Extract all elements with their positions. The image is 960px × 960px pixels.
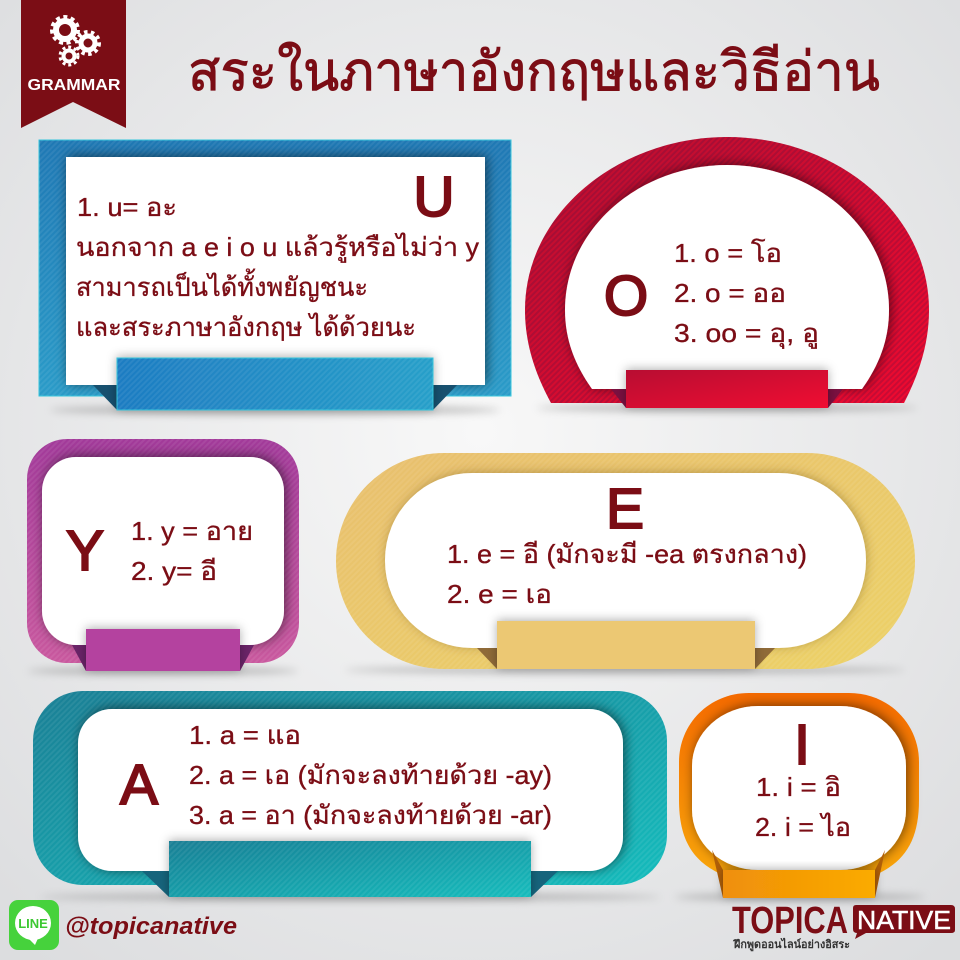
panel: O: [525, 137, 929, 412]
LINE contact: [9, 900, 237, 950]
icon: gears: [52, 17, 99, 65]
LINE contact: @topicanative: [65, 913, 237, 940]
text block U: 1. u= อะ: [77, 192, 177, 222]
panel: A: [33, 691, 667, 901]
text block E: 1. e = อี (มักจะมี -ea ตรงกลาง): [447, 539, 807, 569]
letter Y: Y: [66, 519, 104, 583]
text block U: [76, 192, 479, 342]
letter A: A: [120, 753, 158, 817]
text block O: [674, 238, 819, 349]
text block U: นอกจาก a e i o u แล้วรู้หรือไม่ว่า y: [76, 232, 479, 263]
panel: E: [336, 453, 915, 674]
text block O: 3. oo = อุ, อู: [674, 318, 819, 349]
text block Y: 2. y= อี: [131, 556, 217, 586]
text block E: [447, 539, 807, 609]
text block O: 2. o = ออ: [674, 278, 786, 308]
text block A: 3. a = อา (มักจะลงท้ายด้วย -ar): [189, 800, 552, 830]
text block O: 1. o = โอ: [674, 238, 782, 268]
title: สระในภาษาอังกฤษและวิธีอ่าน: [188, 41, 880, 102]
logo: Topica Native: NATIVE: [857, 905, 951, 935]
logo: Topica Native: [732, 900, 955, 952]
text block Y: 1. y = อาย: [131, 516, 253, 546]
panel: U: [39, 140, 511, 415]
logo: Topica Native: TOPICA: [732, 900, 848, 942]
icon: LINE: LINE: [18, 916, 48, 931]
text block U: และสระภาษาอังกฤษ ได้ด้วยนะ: [76, 312, 416, 342]
grammar ribbon badge: [21, 0, 126, 128]
letter E: E: [606, 477, 644, 541]
text block A: 1. a = แอ: [189, 720, 301, 750]
text block I: 2. i = ไอ: [755, 812, 851, 842]
text block A: [189, 720, 552, 830]
panel: I: [675, 693, 925, 901]
text block A: 2. a = เอ (มักจะลงท้ายด้วย -ay): [189, 760, 552, 790]
text block U: สามารถเป็นได้ทั้งพยัญชนะ: [76, 268, 368, 302]
text block I: [755, 772, 851, 842]
letter O: O: [604, 264, 648, 328]
text block I: 1. i = อิ: [756, 772, 841, 802]
grammar ribbon badge: GRAMMAR: [28, 77, 121, 94]
text block Y: [131, 516, 253, 586]
letter U: U: [413, 165, 455, 229]
text block E: 2. e = เอ: [447, 579, 552, 609]
logo: Topica Native: ฝึกพูดออนไลน์อย่างอิสระ: [732, 937, 850, 952]
letter I: I: [794, 713, 810, 777]
panel: Y: [27, 439, 299, 675]
icon: LINE: [9, 900, 59, 950]
